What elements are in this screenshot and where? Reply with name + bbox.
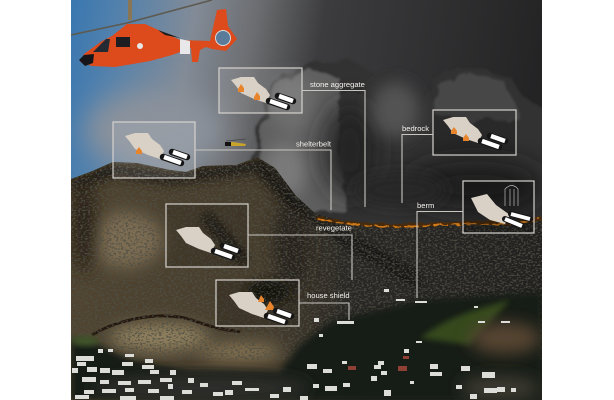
small helicopter: [225, 139, 246, 146]
icon: tree outline: [505, 186, 518, 206]
icon: fire: [258, 295, 274, 310]
leader: berm: berm: [417, 201, 434, 210]
leader: revegetate: revegetate: [316, 224, 352, 232]
leader: bedrock: [402, 124, 433, 203]
leader: shelterbelt: [195, 140, 332, 210]
leader: shelterbelt: shelterbelt: [296, 140, 332, 148]
smoke cloud: [72, 60, 542, 218]
panel: stone aggregate: [219, 68, 302, 113]
leader: bedrock: bedrock: [402, 124, 429, 133]
fire line: [316, 218, 542, 227]
mountain terrain: [71, 150, 542, 400]
sky: [71, 0, 542, 179]
panel: berm: [463, 181, 534, 233]
icon: fire: [136, 147, 142, 154]
houses: [72, 289, 516, 400]
panel: revegetate: [166, 204, 248, 267]
icon: fire: [238, 84, 260, 100]
photo background: [71, 0, 560, 400]
leader: revegetate: [248, 224, 352, 280]
leader: stone aggregate: [302, 80, 365, 207]
leader: house shield: house shield: [307, 291, 350, 300]
leader: stone aggregate: stone aggregate: [310, 80, 365, 89]
panel: house shield: [216, 280, 299, 326]
icon: fire: [451, 127, 469, 141]
red roofs: [348, 356, 409, 371]
panel: bedrock: [433, 110, 516, 155]
leader: house shield: [299, 291, 350, 320]
tree speckle: [71, 150, 542, 360]
town ground: [71, 292, 542, 400]
helicopter: orange rescue: [71, 0, 237, 67]
leader: berm: [417, 201, 463, 298]
panel: shelterbelt: [113, 122, 195, 178]
